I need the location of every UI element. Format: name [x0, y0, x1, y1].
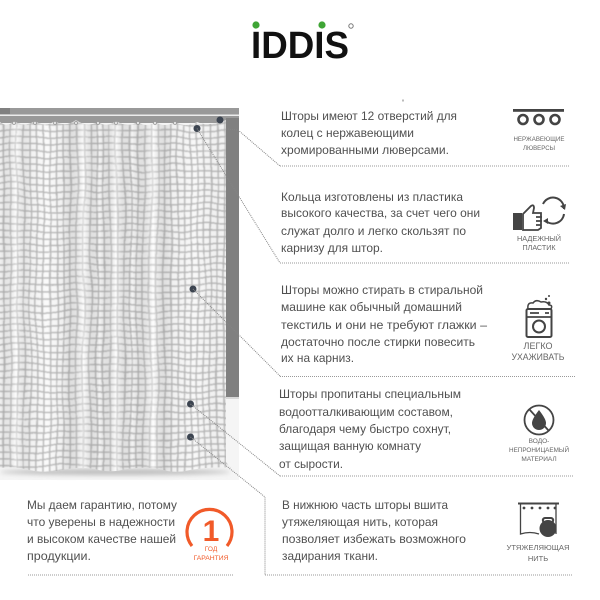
text: water repellent	[279, 387, 461, 471]
icon: washing machine: УХАЖИВАТЬ	[512, 352, 565, 362]
icon: durable plastic	[513, 198, 566, 252]
logo: IDDIS: IDDIS	[251, 25, 349, 67]
badge: 1 year guarantee	[187, 509, 232, 562]
leader line: water repellent	[187, 400, 573, 476]
text: rings: карнизу для штор.	[281, 241, 383, 255]
text: guarantee: Мы даем гарантию, потому	[27, 498, 177, 512]
badge: 1 year guarantee: 1	[203, 515, 219, 548]
text: guarantee: продукции.	[27, 549, 91, 563]
text: guarantee: и высоком качестве нашей	[27, 532, 176, 546]
text: eyelets: Шторы имеют 12 отверстий для	[281, 109, 457, 123]
text: weighted thread: утяжеляющая нить, которая	[282, 515, 438, 529]
leader line: weighted thread	[187, 434, 573, 575]
icon: eyelets	[513, 109, 564, 152]
text: rings: служат долго и легко скользят по	[281, 224, 466, 238]
photo: shower curtain	[0, 100, 250, 490]
text: weighted thread	[282, 498, 466, 563]
text: weighted thread: позволяет избежать возможного	[282, 532, 466, 546]
text: water repellent: Шторы пропитаны специальным	[279, 387, 461, 401]
text: eyelets	[281, 109, 457, 157]
icon: washing machine	[512, 295, 565, 362]
text: washing: достаточно после стирки повесить	[281, 335, 475, 349]
text: guarantee: что уверены в надежности	[27, 515, 175, 529]
text: guarantee	[27, 498, 177, 563]
divider: guarantee	[28, 574, 233, 576]
icon: eyelets: ЛЮВЕРСЫ	[523, 146, 555, 152]
text: washing: текстиль и они не требуют глажки –	[281, 318, 487, 332]
text: rings: высокого качества, за счет чего они	[281, 206, 480, 220]
text: eyelets: хромированными люверсами.	[281, 143, 449, 157]
badge: 1 year guarantee: ГАРАНТИЯ	[194, 555, 229, 562]
icon: durable plastic: НАДЕЖНЫЙ	[517, 234, 561, 243]
text: weighted thread: задирания ткани.	[282, 549, 378, 563]
text: water repellent: защищая ванную комнату	[279, 439, 421, 453]
text: rings	[281, 190, 480, 255]
leader line: rings	[194, 125, 570, 263]
text: weighted thread: В нижнюю часть шторы вшита	[282, 498, 448, 512]
text: washing	[281, 283, 487, 365]
icon: weighted thread: НИТЬ	[528, 554, 548, 563]
speck	[402, 100, 404, 102]
leader line: eyelets	[216, 116, 570, 166]
icon: waterproof: НЕПРОНИЦАЕМЫЙ	[509, 445, 569, 454]
badge: 1 year guarantee: ГОД	[205, 546, 218, 553]
text: water repellent: от сырости.	[279, 457, 343, 471]
text: washing: Шторы можно стирать в стиральной	[281, 283, 483, 297]
icon: waterproof: МАТЕРИАЛ	[521, 456, 557, 463]
text: water repellent: благодаря чему быстро сохнут,	[279, 422, 451, 436]
icon: weighted thread	[506, 502, 570, 563]
text: water repellent: водоотталкивающим составом,	[279, 405, 453, 419]
icon: waterproof	[509, 406, 569, 463]
leader line: washing	[190, 286, 575, 376]
icon: durable plastic: ПЛАСТИК	[522, 243, 556, 252]
icon: weighted thread: УТЯЖЕЛЯЮЩАЯ	[506, 543, 570, 552]
text: rings: Кольца изготовлены из пластика	[281, 190, 463, 204]
text: washing: их на карниз.	[281, 351, 354, 365]
text: washing: машине как обычный домашний	[281, 300, 462, 314]
icon: waterproof: ВОДО-	[529, 438, 549, 445]
icon: washing machine: ЛЕГКО	[524, 341, 552, 351]
icon: eyelets: НЕРЖАВЕЮЩИЕ	[514, 137, 564, 143]
text: eyelets: колец с нержавеющими	[281, 126, 414, 140]
